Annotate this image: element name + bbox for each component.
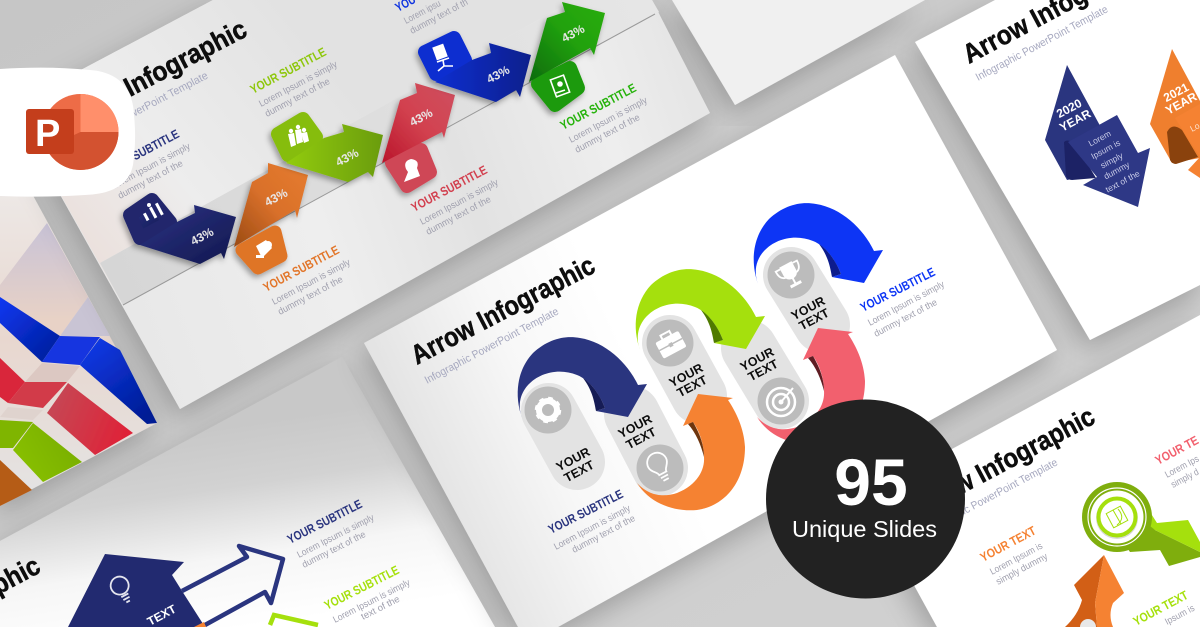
navy step caption [101, 127, 192, 202]
slide title: Infographic [119, 14, 252, 102]
panel: bottom right slide [865, 315, 1200, 627]
orange caption: YOUR TEXT [978, 524, 1039, 565]
capsule: bulb step [632, 414, 660, 468]
arrow step: red: 43% [407, 105, 435, 129]
orange step caption: dummy text of the [276, 274, 345, 318]
capsule labels: TEXT [746, 357, 781, 384]
lime step caption [248, 45, 339, 120]
arrow step: navy [130, 200, 236, 264]
lime step caption: YOUR SUBTITLE [248, 45, 329, 97]
capsule labels: YOUR [738, 345, 776, 374]
orange caption: simply dummy [994, 551, 1050, 588]
navy caption [285, 497, 376, 571]
navy step caption: dummy text of the [116, 158, 185, 202]
fold line [123, 14, 655, 305]
icon: chess knight [404, 159, 420, 182]
green step caption: Lorem Ipsum is simply [567, 95, 649, 146]
badge: 95 unique slides: 95 [834, 445, 908, 519]
arrow: coral [757, 328, 865, 444]
green step caption [558, 81, 649, 156]
arrow step: red [382, 83, 455, 186]
arrow: 2020 year: YEAR [1057, 106, 1093, 134]
badge: 95 unique slides: Unique Slides [792, 516, 937, 542]
panel: left striped slide [0, 135, 157, 506]
icon: office chair [433, 45, 453, 71]
capsule labels: TEXT [675, 373, 710, 400]
navy caption: Lorem Ipsum is simply [295, 512, 376, 561]
heading: Infographic PowerPoint Template [423, 306, 561, 387]
icon: target [758, 378, 804, 424]
arrow: lime [636, 269, 765, 350]
blue caption [858, 265, 947, 340]
panel: top right slide [915, 0, 1200, 340]
arrow step: lime [278, 119, 383, 182]
icon: id badge [550, 75, 570, 97]
capsule labels: YOUR [789, 294, 827, 323]
arrow: orange [637, 394, 745, 510]
slide title: PowerPoint Template [116, 70, 210, 127]
blue caption: Lorem Ipsum is simply [866, 279, 947, 329]
icon: PowerPoint logo: P [35, 113, 60, 155]
red step caption: Lorem Ipsum is simply [418, 177, 500, 228]
capsule labels: TEXT [624, 425, 659, 452]
arrow step: blue [425, 38, 531, 102]
navy step caption: YOUR SUBTITLE [101, 127, 182, 179]
lime caption [322, 563, 412, 626]
navy caption: Lorem Ipsum is simply [552, 503, 633, 553]
icon: trophy [768, 252, 814, 298]
navy caption: dummy text of the [300, 529, 368, 571]
arrow: blue [754, 203, 883, 284]
navy step caption: Lorem Ipsum is simply [110, 141, 192, 192]
arrow: 2021 year: 2021 [1161, 80, 1191, 105]
icon: bar chart [143, 203, 164, 221]
arrow step: lime: 43% [333, 145, 361, 169]
slide title [116, 14, 252, 127]
capsule labels: TEXT [797, 306, 832, 333]
arrow: 2020 year [1045, 65, 1150, 207]
arrow: 2021 year: YEAR [1163, 89, 1199, 117]
arrow step: green [529, 2, 605, 105]
navy caption: YOUR SUBTITLE [546, 487, 625, 537]
icon: briefcase [646, 320, 694, 366]
capsule: trophy step [791, 275, 822, 325]
icon: gear [524, 386, 572, 434]
red caption [1153, 433, 1200, 491]
arrow step: orange: 43% [262, 185, 290, 209]
green step caption: dummy text of the [573, 112, 642, 156]
lime caption: text of the [359, 594, 402, 623]
arrow: 2020 year: text of the [1104, 168, 1142, 195]
orange caption: Lorem Ipsum is [988, 541, 1045, 578]
icon: orange arrow [1065, 555, 1124, 627]
orange step caption [261, 243, 352, 318]
panel: top centre slide [672, 0, 925, 105]
capsule labels: TEXT [562, 458, 597, 485]
lime step caption: dummy text of the [263, 76, 332, 120]
red step caption: YOUR SUBTITLE [409, 163, 490, 215]
icon: green ring connector [1082, 482, 1200, 566]
lime step caption: Lorem Ipsum is simply [257, 59, 339, 110]
badge: 95 unique slides [766, 400, 965, 598]
arrow: 2021 year [1150, 49, 1200, 178]
lime caption: Lorem Ipsum is simply [331, 577, 412, 626]
capsule: gear step [549, 411, 577, 462]
panel: bottom left slide [0, 357, 495, 627]
icon: house arrow [68, 546, 318, 627]
green step caption: YOUR SUBTITLE [558, 81, 639, 133]
capsule labels: YOUR [667, 361, 705, 390]
arrow: 2020 year: simply [1099, 150, 1125, 170]
panel: arrow steps slide [11, 0, 710, 409]
capsule: briefcase step [670, 343, 699, 396]
blue caption: YOUR SUBTITLE [858, 265, 937, 315]
icon: light bulb [107, 573, 136, 606]
arrow step: orange [234, 163, 308, 268]
arrow: navy [518, 337, 647, 418]
arrow step: green: 43% [559, 21, 587, 45]
arrow step: navy: 43% [188, 224, 216, 248]
arrow: 2020 year: dummy [1102, 159, 1132, 181]
arrow: 2020 year: Ipsum is [1089, 138, 1122, 161]
capsule: target step [749, 348, 781, 401]
navy caption: dummy text of the [570, 513, 637, 556]
slide heading: Infographic PowerPoint Template [922, 457, 1060, 538]
arrow: 2020 year: 2020 [1054, 96, 1084, 121]
panel: main arrow infographic slide [364, 55, 1057, 627]
icon: handshake [256, 240, 272, 258]
red step caption [409, 163, 500, 238]
icon: light bulb [636, 444, 684, 492]
arrow step: blue: 43% [484, 62, 512, 86]
icon: PowerPoint logo [0, 68, 135, 197]
slide heading: Arrow Infographic [904, 401, 1100, 524]
capsule labels [554, 294, 832, 485]
capsule labels: YOUR [616, 412, 654, 441]
red step caption: dummy text of the [424, 194, 493, 238]
heading: Arrow Infographic [406, 250, 600, 370]
orange caption [978, 524, 1050, 588]
arrow: 2020 year: Lorem [1087, 128, 1113, 148]
blue caption: dummy text of the [872, 297, 939, 340]
icon: team [288, 125, 309, 147]
orange step caption: YOUR SUBTITLE [261, 243, 342, 295]
lime caption: Ipsum is [1163, 603, 1197, 627]
orange step caption: Lorem Ipsum is simply [270, 257, 352, 308]
navy caption: YOUR SUBTITLE [285, 497, 364, 547]
lime caption: YOUR SUBTITLE [322, 563, 401, 613]
capsule labels: YOUR [554, 445, 592, 474]
